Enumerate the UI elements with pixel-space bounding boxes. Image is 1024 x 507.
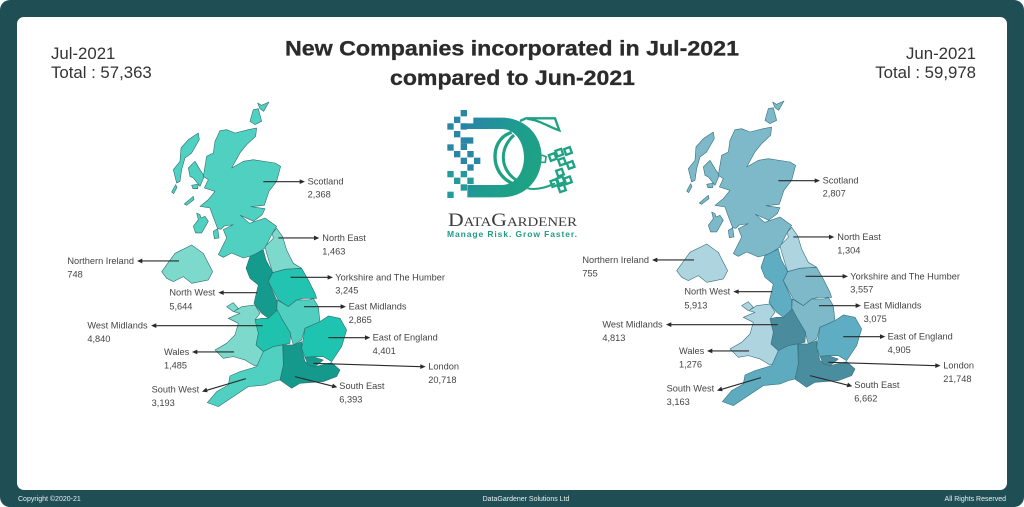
label: Yorkshire and The Humber [291,272,445,296]
footer [18,495,1006,503]
label: West Midlands [87,321,263,344]
text block: Jul-2021 total: Total : 57,363 [51,63,152,82]
region: Wales [730,302,778,365]
region: West Midlands [254,310,291,352]
label: East Midlands [819,301,922,324]
region: North East [780,227,817,272]
label: East Midlands: East Midlands [349,302,407,312]
label: North East: North East [322,233,366,243]
footer: Copyright ©2020-21 [18,495,81,503]
region: East Midlands [792,297,835,344]
label: East Midlands: East Midlands [864,301,922,311]
region: East of England [302,316,347,362]
label: South East: 6,393 [339,394,362,404]
label: South East [295,377,385,404]
region: South East [280,342,340,388]
label: London: London [428,362,459,372]
label: East of England: 4,905 [888,345,911,355]
label: North West: 5,913 [684,300,707,310]
logo: DataGardener [447,110,577,239]
label: Scotland: 2,368 [308,190,331,200]
label: South West: South West [667,384,715,394]
label: Yorkshire and The Humber: Yorkshire and The Humber [850,271,960,281]
label: South West: South West [152,385,200,395]
label: Yorkshire and The Humber: Yorkshire and The Humber [335,272,445,282]
region: Northern Ireland [677,244,728,282]
label: Northern Ireland: Northern Ireland [582,255,649,265]
label: West Midlands [602,320,778,343]
region: South West [207,345,283,407]
region: South East [795,341,855,387]
label: Wales [679,346,749,369]
label: East of England: East of England [373,333,438,343]
label: Yorkshire and The Humber: 3,557 [850,285,873,295]
label: North East: North East [837,232,881,242]
label: West Midlands: 4,813 [602,333,625,343]
label: East Midlands: 3,075 [864,314,887,324]
region: West Midlands [769,309,806,351]
label: North West: 5,644 [169,301,192,311]
region: North West [761,249,792,317]
label: Scotland [778,175,859,199]
label: East of England: East of England [888,332,953,342]
label: Scotland: 2,807 [823,189,846,199]
label: Northern Ireland: 748 [67,270,83,280]
label: Northern Ireland: 755 [582,269,598,279]
label: East of England [328,333,438,356]
region: Northern Ireland [162,245,213,283]
region: East Midlands [277,298,320,345]
region: Scotland [715,127,796,257]
title: New Companies incorporated in Jul-2021 [285,36,739,60]
region: London [820,356,838,366]
label: North East [278,233,366,256]
label: North East [793,232,881,255]
region: Scotland [200,128,281,258]
text block: Jun-2021 total: Total : 59,978 [875,63,976,82]
map: Jun-2021 UK regions [582,101,974,407]
label: South West: 3,163 [667,397,690,407]
label: London: London [943,361,974,371]
label: Northern Ireland [582,255,694,279]
label: Scotland: Scotland [823,175,859,185]
label: North West [684,287,772,310]
label: North West: North West [169,288,216,298]
region: London [305,357,323,367]
text block: Jul-2021 total [51,44,152,82]
label: North West: North West [684,287,731,297]
label: London [828,361,974,384]
label: East of England [843,332,953,355]
label: North West [169,288,257,311]
label: South East: South East [339,381,385,391]
text block: Jul-2021 total: Jul-2021 [51,44,115,63]
map: Jul-2021 UK regions [67,102,459,408]
region: North West [246,250,277,318]
label: South West [667,378,761,407]
region: Scottish islands [172,102,269,239]
region: South West [722,344,798,406]
title: compared to Jun-2021 [390,66,635,90]
region: Wales [215,303,263,366]
region: Scottish islands [687,101,784,238]
logo: DataGardener: Manage Risk. Grow Faster. [447,229,577,239]
title [285,36,739,90]
label: South West [152,379,246,408]
label: London: 21,748 [943,374,971,384]
label: Wales: Wales [679,346,705,356]
label: East Midlands: 2,865 [349,315,372,325]
label: West Midlands: 4,840 [87,334,110,344]
label: North East: 1,304 [837,245,860,255]
label: Scotland [263,176,344,200]
label: South East [810,376,900,403]
label: Wales: 1,276 [679,359,702,369]
text block: Jun-2021 total: Jun-2021 [906,44,976,63]
region: North East [265,228,302,273]
footer: DataGardener Solutions Ltd [483,496,569,503]
label: Scotland: Scotland [308,176,344,186]
label: North East: 1,463 [322,246,345,256]
label: South East: 6,662 [854,393,877,403]
label: West Midlands: West Midlands [602,320,663,330]
region: Yorkshire and The Humber [268,268,317,307]
label: East Midlands [304,302,407,325]
text block: Jun-2021 total [875,44,976,82]
label: Wales: 1,485 [164,360,187,370]
region: East of England [817,315,862,361]
label: Wales [164,347,234,370]
label: South West: 3,193 [152,398,175,408]
footer: All Rights Reserved [945,496,1006,503]
label: Yorkshire and The Humber: 3,245 [335,286,358,296]
label: Wales: Wales [164,347,190,357]
label: West Midlands: West Midlands [87,321,148,331]
label: Northern Ireland [67,256,179,280]
label: Northern Ireland: Northern Ireland [67,256,134,266]
label: South East: South East [854,380,900,390]
label: East of England: 4,401 [373,346,396,356]
region: Yorkshire and The Humber [783,267,832,306]
label: London [313,362,459,385]
label: Yorkshire and The Humber [806,271,960,295]
logo: DataGardener: DataGardener [448,210,577,231]
label: London: 20,718 [428,375,456,385]
